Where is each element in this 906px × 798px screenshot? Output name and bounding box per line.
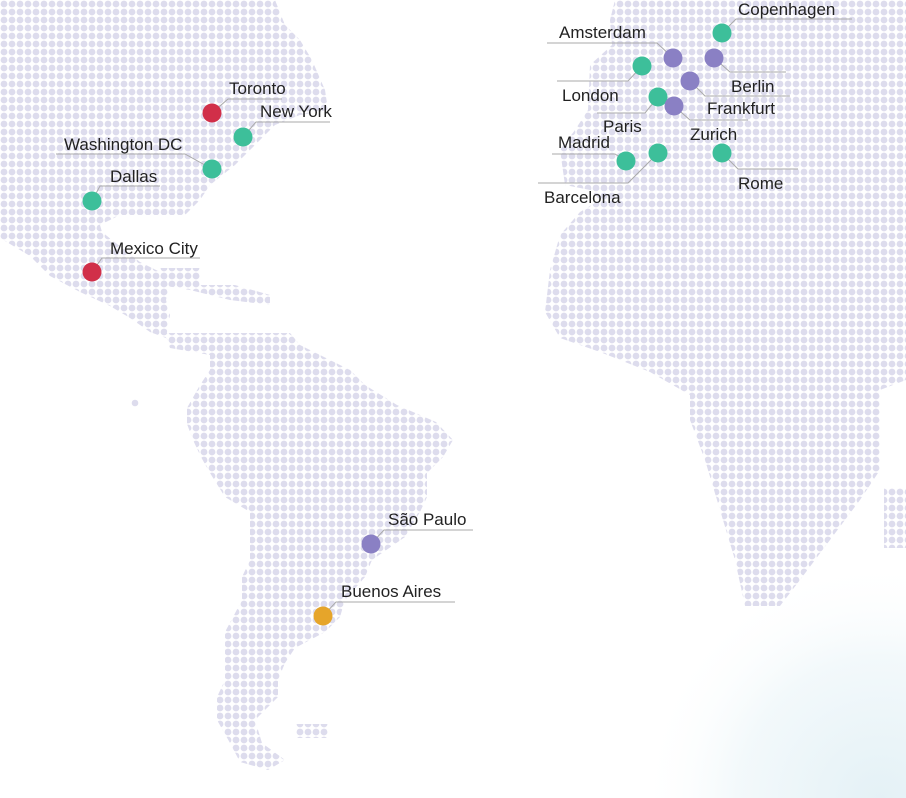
marker: New York [234,102,332,146]
marker: Copenhagen [712,0,852,42]
marker: Zurich: Zurich [690,125,737,144]
marker: Barcelona [538,144,668,207]
marker: Paris [597,88,668,136]
map: North America [0,0,328,338]
marker: São Paulo [362,510,473,554]
marker: Frankfurt [680,72,790,118]
marker: Mexico City [82,239,200,282]
marker: Paris: Paris [603,117,642,136]
marker: Barcelona: Barcelona [544,188,621,207]
marker: Frankfurt: Frankfurt [707,99,775,118]
marker: Buenos Aires: Buenos Aires [341,582,441,601]
marker: Dallas [82,167,160,210]
marker: Buenos Aires [314,582,455,626]
marker: Berlin: Berlin [731,77,774,96]
marker: Rome: Rome [738,174,783,193]
marker: London: London [562,86,619,105]
marker: Toronto [202,79,286,122]
marker: Toronto: Toronto [229,79,286,98]
map: South America [132,333,453,770]
marker: Rome [712,144,798,193]
marker: New York: New York [260,102,332,121]
marker: Amsterdam [547,23,682,68]
marker: Madrid: Madrid [558,133,610,152]
marker: São Paulo: São Paulo [388,510,466,529]
marker: Madrid [552,133,636,170]
marker: Berlin [704,48,786,96]
marker: Copenhagen: Copenhagen [738,0,835,19]
marker: Mexico City: Mexico City [110,239,198,258]
marker: Zurich [664,96,748,144]
marker: Washington DC: Washington DC [64,135,182,154]
map: Europe, Africa, Asia [545,0,906,606]
marker: Dallas: Dallas [110,167,157,186]
marker: Amsterdam: Amsterdam [559,23,646,42]
marker: Washington DC [56,135,222,178]
marker: London [557,56,652,105]
